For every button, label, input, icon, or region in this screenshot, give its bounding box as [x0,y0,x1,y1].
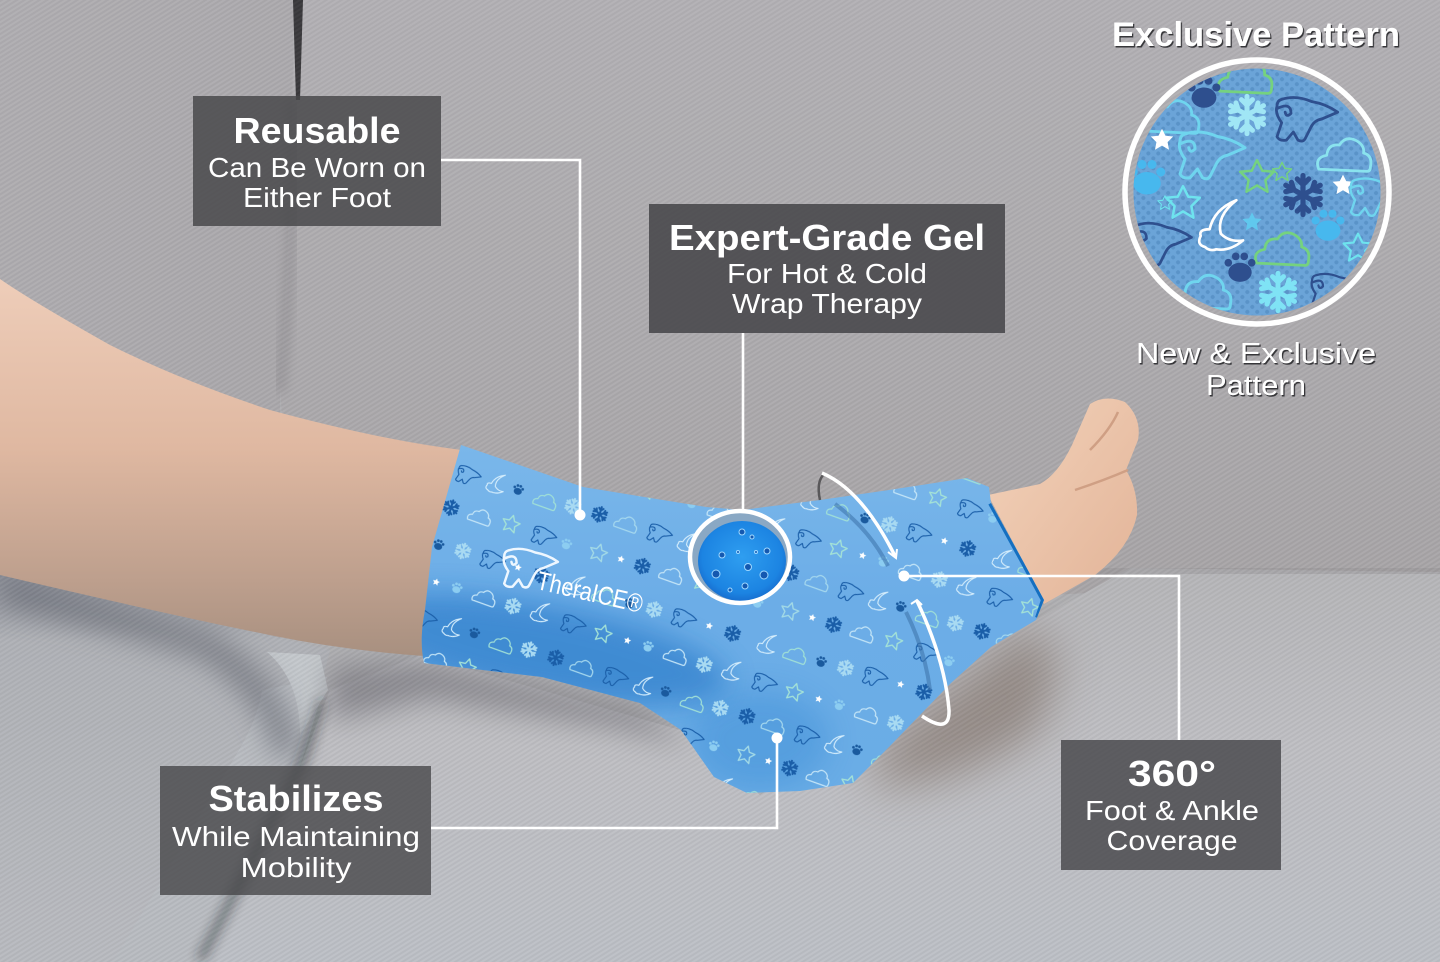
gel droplets [712,529,770,592]
callout heading: Expert-Grade Gel [669,217,985,258]
cushion gap shadow [280,100,293,392]
callout text line 2: Either Foot [243,182,391,213]
caption: New & Exclusive Pattern: Pattern [1206,370,1306,402]
blue compression sleeve [422,445,1044,793]
left lower cushion [0,570,330,962]
callout text: Can Be Worn on [208,152,426,183]
360 coverage arrow: bottom [906,600,949,724]
callout text: Foot & Ankle [1085,795,1259,826]
back fold shading [300,91,1100,105]
seat edge shade [1040,568,1440,574]
seat cushion [200,568,1440,962]
cushion piping band [113,677,327,962]
connector: Reusable [441,160,586,520]
callout text: For Hot & Cold [727,258,927,289]
toe creases [1075,412,1128,490]
callout: 360 [1061,740,1281,870]
callout text line 2: Wrap Therapy [732,288,922,319]
callout text: While Maintaining [172,821,420,852]
callout text line 2: Coverage [1106,825,1238,856]
caption: New & Exclusive Pattern [1136,338,1376,402]
callout: Expert-Grade Gel [649,204,1005,333]
left armrest cushion [0,0,294,640]
light patch by the leg [267,652,328,735]
leg [0,279,462,656]
connector: Stabilizes [431,732,782,828]
brand name: TheraICE® [534,565,646,619]
callout: Reusable [193,96,441,226]
sofa back cushion [280,0,1440,640]
TheraICE logo [504,549,646,619]
360 coverage arrow: top [819,473,897,566]
shadow under leg [330,662,690,745]
sleeve cuff [991,503,1044,618]
callout heading: Reusable [234,110,400,151]
sleeve shading [422,579,737,720]
callout heading: Stabilizes [208,778,384,819]
foot [988,398,1139,604]
callout: Stabilizes [160,766,431,895]
shadow under foot [870,625,1060,785]
swatch ring [1125,60,1389,324]
callout text line 2: Mobility [240,852,352,883]
connector: 360 [898,570,1179,740]
gel window [690,511,790,603]
pattern swatch [1125,60,1403,324]
pattern icons [1134,68,1380,314]
heading: Exclusive Pattern: Exclusive Pattern [1112,16,1400,54]
callout heading: 360° [1128,753,1216,794]
connector: Expert-Grade Gel [742,333,744,512]
cushion crease [200,700,322,960]
cushion arc shadow [0,590,288,755]
caption: New & Exclusive Pattern: New & Exclusive [1136,338,1376,370]
sleeve pattern [422,464,1038,793]
bear mark [504,549,558,587]
